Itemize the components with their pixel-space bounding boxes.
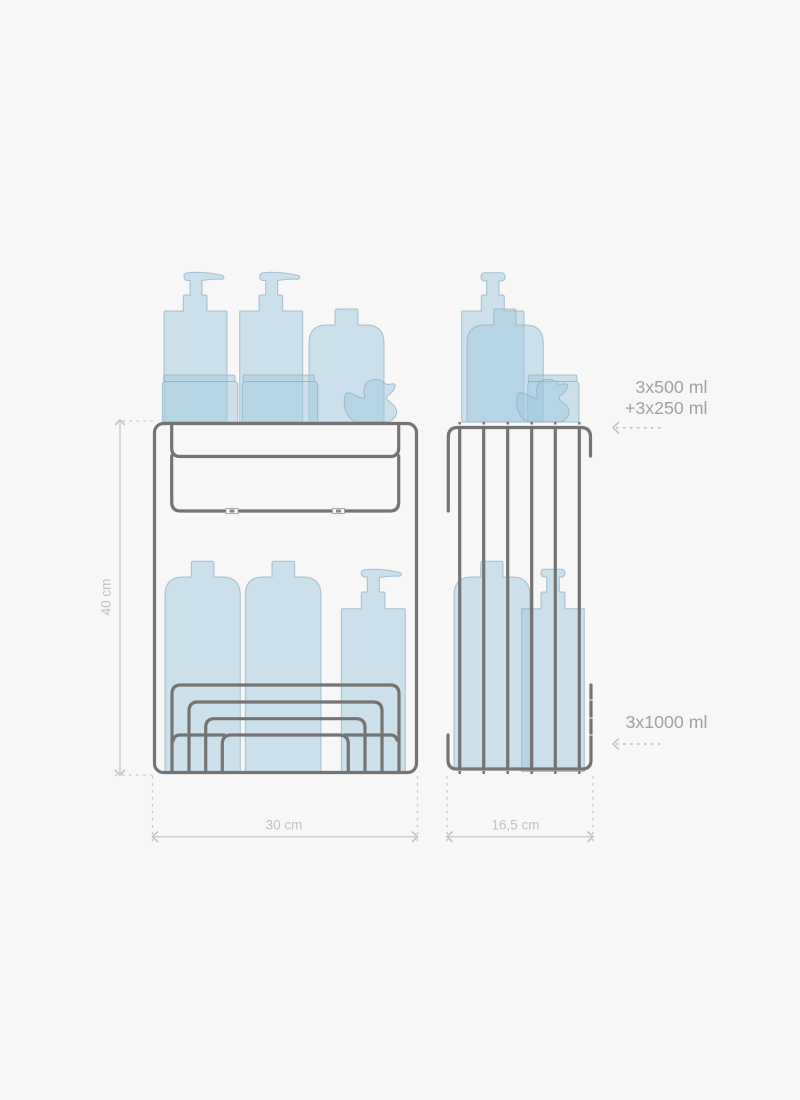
clip connector 1 <box>226 508 238 514</box>
lower wire arches <box>172 685 399 770</box>
large pump bottle <box>341 569 405 772</box>
vertical rods <box>460 422 579 774</box>
label: top shelf capacity: +3x250 ml <box>625 398 708 418</box>
side jar <box>528 382 579 422</box>
dimension: depth 16,5 cm <box>447 776 593 846</box>
side large bottle <box>454 561 530 770</box>
label: 40 cm: 40 cm <box>99 579 114 615</box>
top shelf side bottles <box>462 273 579 422</box>
upper wire loops <box>172 424 399 514</box>
dimension: width 30 cm <box>152 776 418 846</box>
bottom wire hook <box>448 685 591 769</box>
top shelf front bottles <box>162 272 397 422</box>
side large pump bottle <box>522 569 584 772</box>
icon: side rubber duck <box>517 379 569 422</box>
jar 2 <box>242 382 318 422</box>
label: top shelf capacity: 3x500 ml <box>635 377 708 397</box>
dimension: height 40 cm <box>99 420 153 775</box>
arrow: top shelf <box>613 422 665 434</box>
top wire hook <box>448 428 590 511</box>
large bottle 1 <box>165 561 240 772</box>
label: lower shelf capacity: 3x1000 ml <box>625 712 708 732</box>
panel: front view <box>154 272 416 772</box>
wire highlights <box>589 700 593 735</box>
side pump bottle <box>462 273 524 422</box>
pump bottle 1 <box>164 272 227 422</box>
lower shelf side bottles <box>454 561 584 772</box>
label: top shelf capacity <box>625 377 708 418</box>
icon: rubber duck <box>344 379 397 422</box>
jar 2 lid <box>243 375 314 382</box>
clip connector 2 <box>332 508 344 514</box>
side round bottle <box>467 309 543 422</box>
lower shelf front bottles <box>165 561 405 772</box>
pump bottle 2 <box>240 272 303 422</box>
jar 1 lid <box>164 375 235 382</box>
wire frame outer <box>154 424 416 772</box>
arrow: lower shelf <box>613 738 665 750</box>
side jar lid <box>528 375 577 382</box>
label: 16,5 cm: 16,5 cm <box>491 818 540 832</box>
label: 30 cm: 30 cm <box>266 818 302 832</box>
large bottle 2 <box>245 561 321 772</box>
panel: side view <box>448 273 593 774</box>
round shoulder bottle <box>309 309 384 422</box>
jar 1 <box>162 382 238 422</box>
